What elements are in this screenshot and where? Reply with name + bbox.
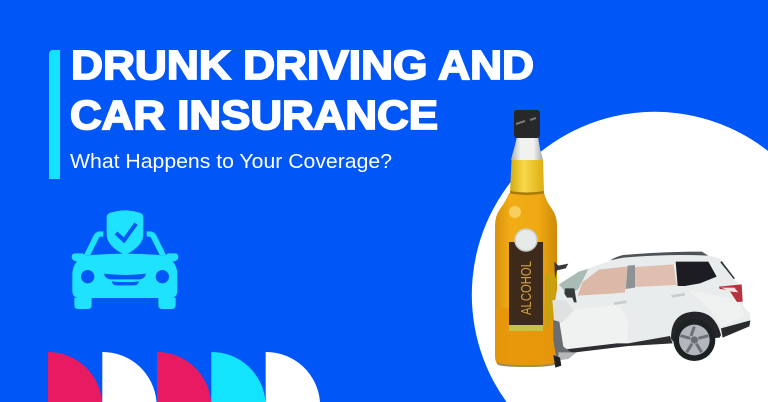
icon: car with shield: [72, 210, 178, 309]
lower door panel: [560, 305, 628, 349]
crumpled front: [552, 300, 574, 323]
tail light: [719, 284, 743, 302]
door handles: [613, 293, 685, 305]
bottle label text: ALCOHOL: [519, 261, 535, 315]
detached hood fragment: [554, 262, 568, 279]
crashed white car: [545, 252, 751, 368]
rear bumper: [721, 320, 750, 338]
decorative quarter shapes: [48, 352, 320, 402]
title: [70, 42, 534, 138]
car body: [553, 252, 751, 360]
subtitle: What Happens to Your Coverage?: [70, 151, 392, 173]
windshield: [559, 269, 588, 296]
bottle splash: [545, 272, 557, 328]
front side window: [578, 266, 628, 296]
title: CAR INSURANCE: [70, 92, 438, 138]
illustration: bottle and crashed car: [495, 110, 751, 368]
title accent bar: [49, 50, 60, 179]
side mirror: [564, 288, 577, 302]
rear wheel: [673, 319, 715, 361]
window pillar: [626, 265, 635, 289]
roof rail: [610, 252, 708, 260]
title: DRUNK DRIVING AND: [71, 42, 534, 88]
bottle of alcohol: [495, 110, 557, 367]
side sill: [560, 336, 673, 355]
rear dark window: [676, 262, 717, 286]
wheel arch: [671, 312, 721, 342]
white circle backdrop: [472, 112, 768, 402]
rear side window: [635, 264, 677, 287]
